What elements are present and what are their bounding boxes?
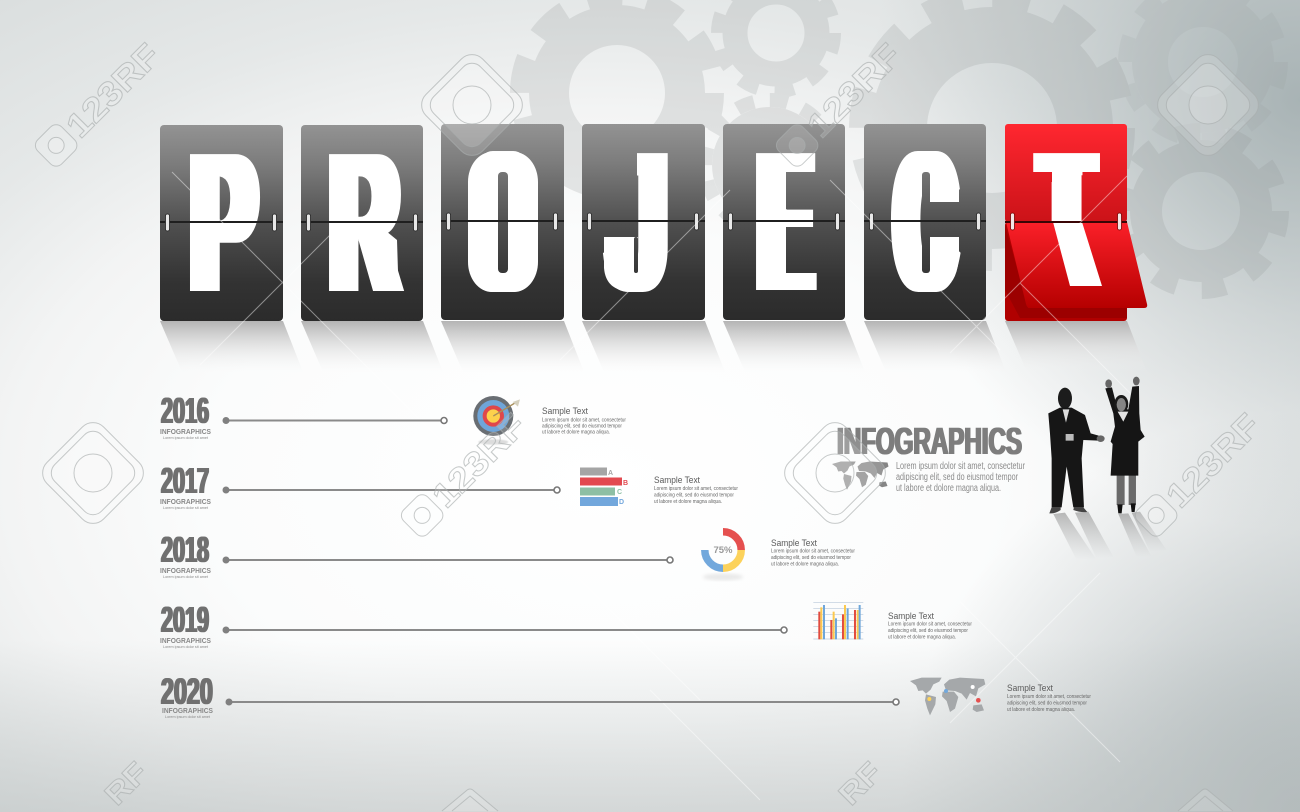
text block 2018 — [771, 538, 855, 568]
line 2017 — [222, 486, 560, 494]
tile T, red flipping: T — [1041, 111, 1092, 333]
tile shadows — [160, 321, 1147, 372]
gears background — [520, 0, 1281, 290]
flip board title: PROJECT — [160, 124, 1148, 321]
year 2016: 2016 — [161, 391, 209, 431]
tile J: J — [608, 110, 668, 332]
foot shadows — [1053, 512, 1167, 560]
text block 2020: Lorem ipsum dolor sit amet, consectetur — [1007, 694, 1091, 700]
heading: INFOGRAPHICS: INFOGRAPHICS — [837, 421, 1022, 463]
year 2018: 2018 — [161, 530, 209, 570]
icon: labelled bars: D — [619, 499, 624, 506]
text block 2019 — [888, 611, 972, 640]
caption 2017 — [160, 499, 211, 510]
caption 2020: Lorem ipsum dolor sit amet — [165, 715, 211, 719]
year 2020: 2020 — [161, 670, 213, 712]
businesswoman with raised arms — [1105, 377, 1145, 513]
line 2020 — [226, 698, 899, 706]
caption 2018: Lorem ipsum dolor sit amet — [163, 575, 209, 579]
tile P — [160, 113, 283, 334]
line 2019 — [222, 626, 787, 634]
caption 2019 — [160, 638, 211, 649]
icon: bar chart — [813, 603, 863, 639]
silhouettes of two business people — [1048, 377, 1167, 560]
diagonal light lines — [172, 172, 1130, 800]
watermark stamps: 123RF — [425, 407, 534, 515]
text block 2018: Sample Text — [771, 538, 817, 549]
caption 2018 — [160, 568, 211, 579]
watermark stamps: 123RF — [59, 37, 168, 145]
caption 2020: INFOGRAPHICS — [162, 708, 213, 715]
text block 2019: adipiscing elit, sed do eiusmod tempor — [888, 628, 968, 634]
text block 2019: ut labore et dolore magna aliqua. — [888, 634, 956, 640]
caption 2016: INFOGRAPHICS — [160, 429, 211, 436]
infographics callout — [832, 421, 1026, 494]
paragraph: adipiscing elit, sed do eiusmod tempor — [896, 472, 1019, 483]
timeline row 2019 — [160, 600, 972, 649]
year 2017: 2017 — [161, 461, 209, 501]
text block 2020 — [1007, 683, 1091, 713]
icon: donut 75% — [703, 532, 743, 580]
text block 2016: adipiscing elit, sed do eiusmod tempor — [542, 424, 622, 430]
tile O — [441, 110, 564, 333]
caption 2020 — [162, 708, 213, 719]
timeline row 2020 — [161, 670, 1091, 719]
icon: small world map — [832, 462, 888, 490]
text block 2016: Lorem ipsum dolor sit amet, consectetur — [542, 418, 626, 424]
caption 2017: Lorem ipsum dolor sit amet — [163, 506, 209, 510]
tile C: C — [897, 111, 954, 333]
icon: labelled bars: C — [617, 489, 622, 496]
icon: donut 75%: 75% — [713, 545, 733, 556]
tile J — [582, 124, 705, 320]
paragraph: Lorem ipsum dolor sit amet, consectetur — [896, 461, 1026, 472]
text block 2018: adipiscing elit, sed do eiusmod tempor — [771, 555, 851, 561]
tile P: P — [192, 113, 255, 334]
businessman — [1048, 388, 1105, 513]
text block 2019: Lorem ipsum dolor sit amet, consectetur — [888, 622, 972, 628]
watermark stamps: 123RF — [1159, 407, 1268, 515]
watermark stamps: RF — [833, 756, 888, 812]
text block 2019: Sample Text — [888, 611, 934, 622]
text block 2017: Sample Text — [654, 475, 700, 486]
year 2019: 2019 — [161, 600, 209, 640]
tile T, red flipping — [1005, 124, 1148, 321]
text block 2016 — [542, 406, 626, 436]
line 2016 — [222, 417, 447, 424]
icon: labelled bars: B — [623, 480, 628, 487]
caption 2019: INFOGRAPHICS — [160, 638, 211, 645]
timeline row 2016 — [160, 391, 626, 445]
icon: labelled bars — [580, 468, 628, 506]
tile O: O — [475, 110, 531, 333]
icon: labelled bars: A — [608, 470, 613, 477]
caption 2018: INFOGRAPHICS — [160, 568, 211, 575]
text block 2020: Sample Text — [1007, 683, 1053, 694]
timeline row 2017 — [160, 461, 738, 510]
caption 2016: Lorem ipsum dolor sit amet — [163, 436, 209, 440]
text block 2016: Sample Text — [542, 406, 588, 417]
icon: world map with pins — [910, 678, 985, 715]
tile R: R — [331, 110, 398, 333]
text block 2018: ut labore et dolore magna aliqua. — [771, 562, 839, 568]
watermark stamps: RF — [99, 756, 154, 812]
caption 2016 — [160, 429, 211, 440]
text block 2020: ut labore et dolore magna aliqua. — [1007, 707, 1075, 713]
text block 2018: Lorem ipsum dolor sit amet, consectetur — [771, 548, 855, 554]
text block 2017: ut labore et dolore magna aliqua. — [654, 499, 722, 505]
paragraph — [896, 461, 1026, 494]
caption 2017: INFOGRAPHICS — [160, 499, 211, 506]
paragraph: ut labore et dolore magna aliqua. — [896, 483, 1001, 494]
watermark stamps: 123RF — [800, 37, 909, 145]
tile E: E — [761, 109, 810, 333]
text block 2017 — [654, 475, 738, 505]
icon: target with dart — [473, 396, 520, 445]
tile E — [723, 109, 845, 333]
text block 2020: adipiscing elit, sed do eiusmod tempor — [1007, 700, 1087, 706]
timeline row 2018 — [160, 530, 855, 580]
text block 2017: Lorem ipsum dolor sit amet, consectetur — [654, 486, 738, 492]
line 2018 — [222, 556, 673, 564]
text block 2017: adipiscing elit, sed do eiusmod tempor — [654, 492, 734, 498]
tile R — [301, 110, 423, 333]
text block 2016: ut labore et dolore magna aliqua. — [542, 430, 610, 436]
tile C — [864, 111, 986, 333]
caption 2019: Lorem ipsum dolor sit amet — [163, 645, 209, 649]
